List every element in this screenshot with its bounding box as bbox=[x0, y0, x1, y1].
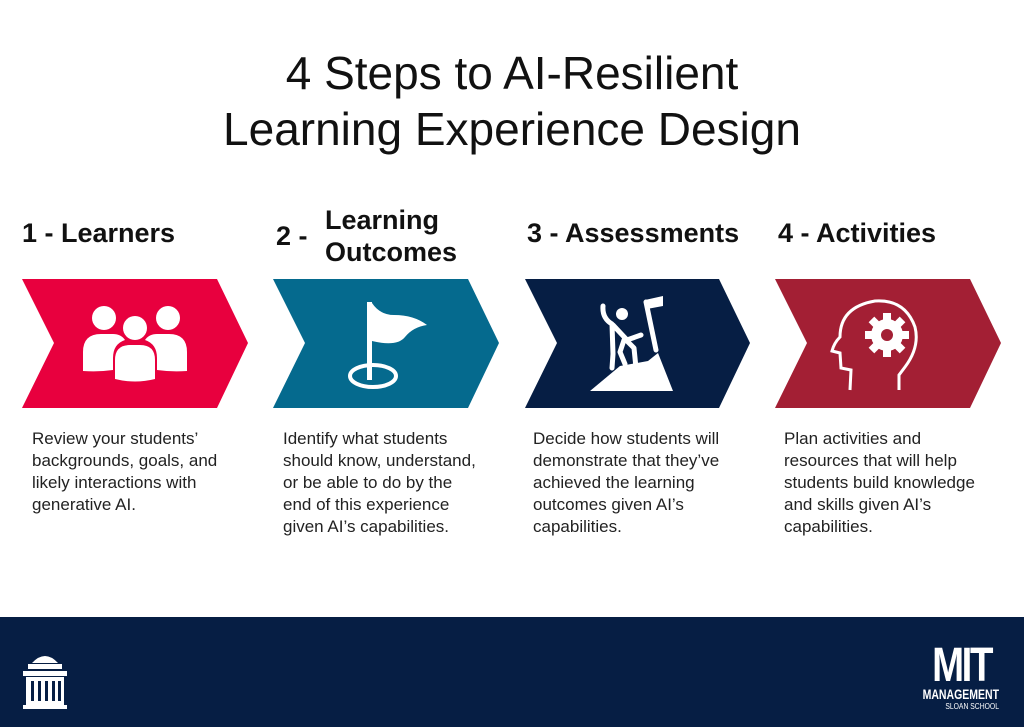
heading: 2 Learning Outcomes: Learning bbox=[325, 205, 439, 235]
logo: MIT Management Sloan School bbox=[923, 639, 999, 711]
title: Learning Experience Design bbox=[223, 103, 801, 155]
chevron: activities bbox=[775, 279, 1001, 408]
icon: head with gear bbox=[832, 301, 916, 390]
heading: 3 Assessments: 3 - Assessments bbox=[527, 218, 739, 248]
heading: 4 Activities: 4 - Activities bbox=[778, 218, 936, 248]
footer bbox=[0, 617, 1024, 727]
heading: 1 Learners: 1 - Learners bbox=[22, 218, 175, 248]
text: assessments: Decide how students will demonstrate that they’ve achieved the learning outcomes given AI’s capabilities. bbox=[533, 429, 719, 536]
chevron: assessments bbox=[525, 279, 750, 408]
logo: MIT Management Sloan School: SLOAN SCHOOL bbox=[945, 702, 999, 711]
logo: MIT Management Sloan School: MANAGEMENT bbox=[923, 686, 999, 702]
heading: 2 Learning Outcomes: 2 - bbox=[276, 221, 308, 251]
text: learners: Review your students’ backgrounds, goals, and likely interactions with generative AI. bbox=[32, 429, 217, 514]
heading: 2 Learning Outcomes bbox=[276, 205, 457, 267]
icon: climber bbox=[590, 296, 673, 391]
chevrons bbox=[22, 279, 1001, 408]
chevron: outcomes bbox=[273, 279, 499, 408]
icon: people bbox=[83, 306, 187, 382]
text: activities: Plan activities and resources that will help students build knowledge and skills given AI’s capabilities. bbox=[784, 429, 975, 536]
title: 4 Steps to AI-Resilient bbox=[286, 47, 738, 99]
icon: flag bbox=[350, 302, 427, 387]
chevron: learners bbox=[22, 279, 248, 408]
text: outcomes: Identify what students should know, understand, or be able to do by the end of this experience given AI’s capabilities. bbox=[283, 429, 476, 536]
title bbox=[223, 47, 801, 155]
logo: MIT Management Sloan School: MIT bbox=[932, 639, 991, 692]
icon: dome building bbox=[23, 656, 67, 709]
heading: 2 Learning Outcomes: Outcomes bbox=[325, 237, 457, 267]
